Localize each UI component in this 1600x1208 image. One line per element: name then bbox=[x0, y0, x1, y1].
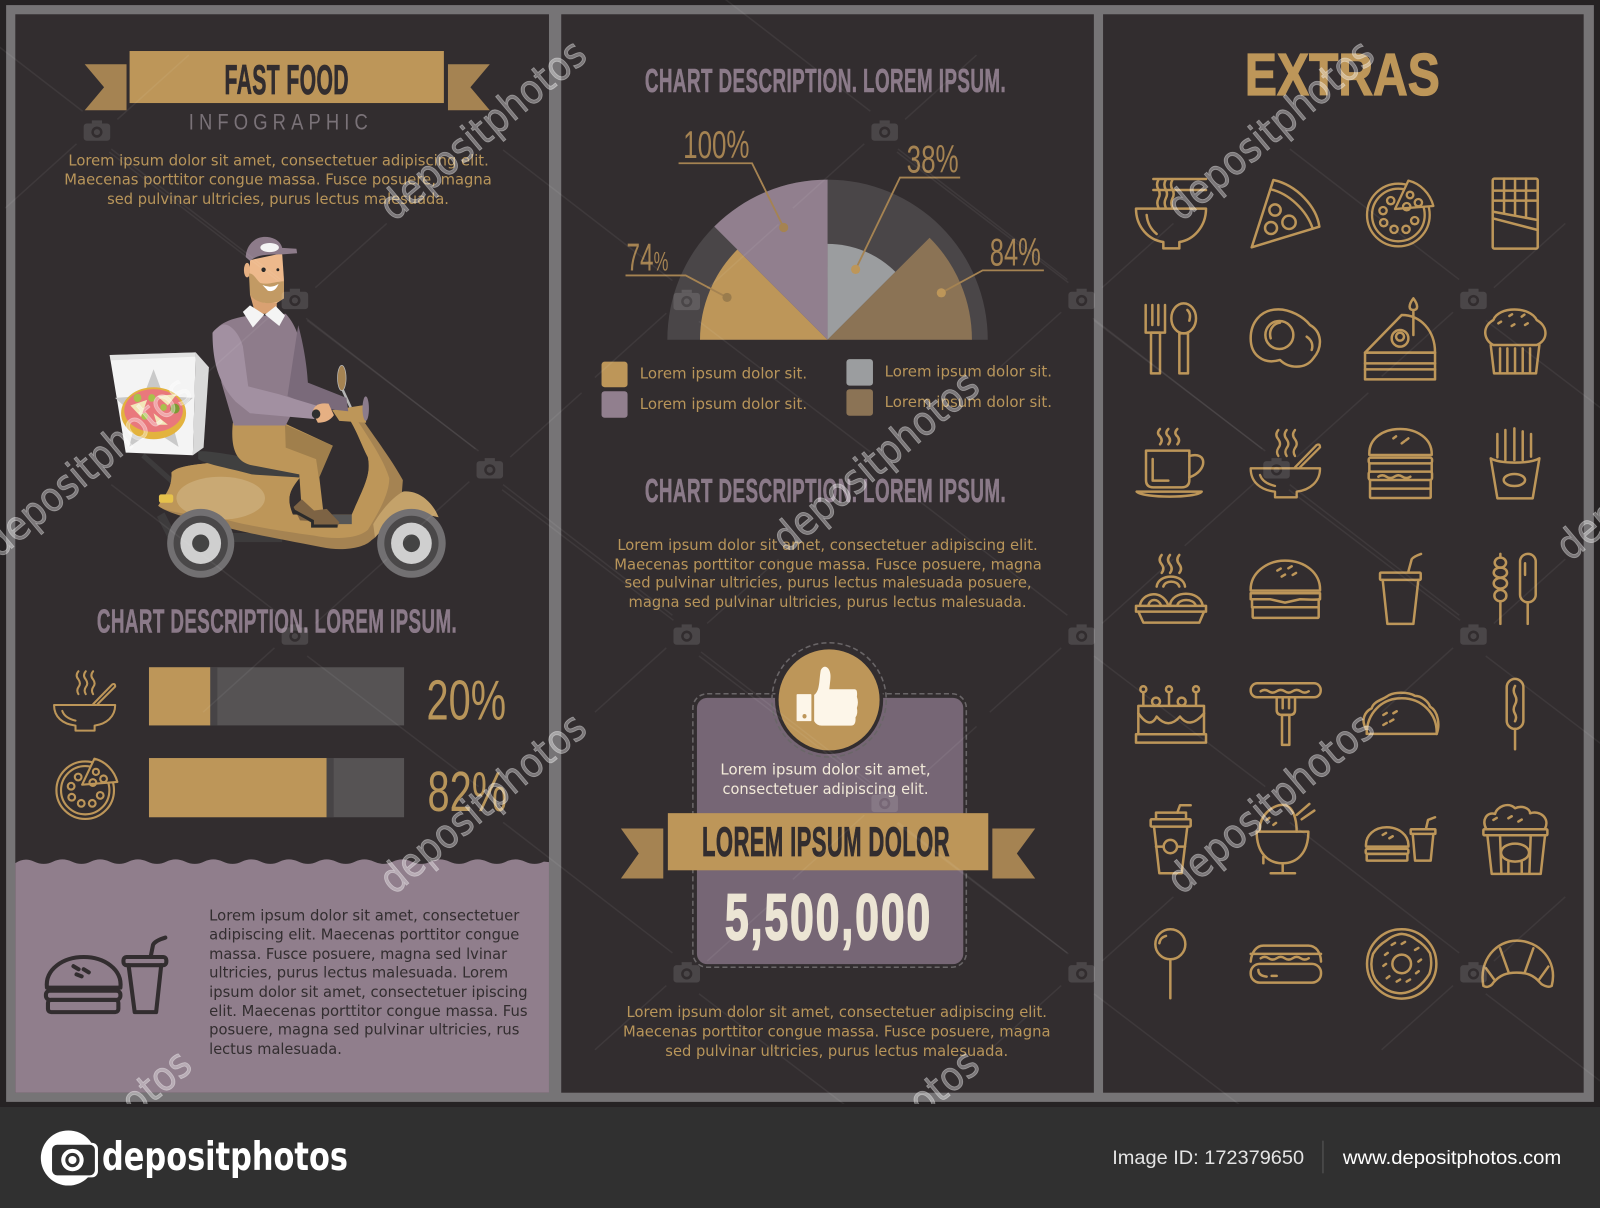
panel: fast food bbox=[15, 51, 549, 1093]
footer divider bbox=[1322, 1141, 1323, 1173]
heading: extras: EXTRAS bbox=[1245, 41, 1440, 108]
mirror and handle bbox=[343, 390, 351, 407]
icon: fried egg bbox=[1251, 309, 1320, 367]
callout: 100%: 100% bbox=[683, 124, 749, 167]
watermarks: depositphotos bbox=[1157, 703, 1383, 903]
watermarks: depositphotos bbox=[369, 703, 596, 903]
icon: noodle bowl bbox=[1136, 179, 1206, 248]
icon: sausage on fork bbox=[1251, 683, 1321, 745]
head bbox=[244, 263, 250, 277]
subtitle: INFOGRAPHIC bbox=[189, 110, 368, 135]
bar chart: 20%: 20% bbox=[427, 668, 506, 731]
icon: stacked burger bbox=[1369, 429, 1432, 498]
intro text: Lorem ipsum dolor sit amet, consectetuer adipiscing elit. bbox=[68, 151, 489, 169]
bar chart: 82%: 82% bbox=[428, 760, 507, 823]
icon: birthday cake bbox=[1136, 686, 1206, 743]
description text: sed pulvinar ultricies, purus lectus malesuada posuere, bbox=[624, 574, 1032, 592]
icon: pizza bbox=[56, 759, 117, 819]
pants bbox=[232, 423, 333, 511]
legend bbox=[602, 359, 1052, 418]
footer text bbox=[623, 1003, 1051, 1060]
lavender panel text: elit. Maecenas porttitor congue massa. Fus bbox=[209, 1002, 528, 1020]
lavender panel text: ipsum dolor sit amet, consectetuer ipiscing bbox=[209, 983, 528, 1001]
icon: burger bbox=[1251, 561, 1320, 618]
footer image id: Image ID: 172379650 bbox=[1112, 1147, 1304, 1169]
collar bbox=[243, 305, 264, 328]
icon: noodle plate bbox=[1136, 555, 1206, 623]
icon grid rows 4-7 bbox=[1136, 554, 1553, 999]
wheels bbox=[167, 509, 234, 578]
stat card: consectetuer adipiscing elit. bbox=[722, 780, 929, 798]
description text: Lorem ipsum dolor sit amet, consectetuer adipiscing elit. bbox=[617, 536, 1038, 554]
torso bbox=[214, 314, 307, 425]
icon: coffee cup bbox=[1137, 429, 1203, 497]
panel: fast food background bbox=[15, 14, 549, 1093]
icon: coffee to go bbox=[1151, 805, 1191, 873]
icon: taco bbox=[1364, 693, 1438, 734]
lavender panel text: massa. Fusce posuere, magna sed lvinar bbox=[209, 945, 508, 963]
callout: 74%: 74% bbox=[627, 236, 668, 279]
card text: Lorem ipsum dolor sit amet, bbox=[720, 760, 931, 778]
big number: 5,500,000 bbox=[725, 881, 932, 954]
footer text: sed pulvinar ultricies, purus lectus malesuada. bbox=[665, 1042, 1008, 1060]
lavender panel text: posuere, magna sed pulvinar ultricies, rus bbox=[209, 1021, 519, 1039]
icon: donut bbox=[1367, 929, 1436, 999]
seat bbox=[198, 451, 300, 477]
icon: cup with straw bbox=[1380, 554, 1421, 624]
watermarks: depositphotos bbox=[1157, 29, 1383, 230]
lavender panel text: adipiscing elit. Maecenas porttitor congue bbox=[209, 926, 519, 944]
icon: thumbs up badge bbox=[772, 643, 886, 757]
icon: skewer and corn dog bbox=[1494, 554, 1536, 624]
icon: corn dog bbox=[1507, 679, 1523, 749]
icon: burger and drink bbox=[46, 938, 166, 1012]
watermarks: depositphotos bbox=[369, 29, 596, 230]
legend: Lorem ipsum dolor sit. bbox=[885, 362, 1052, 380]
scooter body bbox=[158, 411, 439, 549]
stat card bbox=[621, 643, 1035, 967]
cap bbox=[246, 237, 297, 261]
icon: burger and drink bbox=[1366, 817, 1435, 861]
heading: chart 1: CHART DESCRIPTION. LOREM IPSUM. bbox=[645, 63, 1006, 100]
icon: croissant bbox=[1483, 941, 1553, 987]
legend: Lorem ipsum dolor sit. bbox=[640, 365, 807, 383]
description text: magna sed pulvinar ultricies, purus lectus malesuada. bbox=[629, 593, 1027, 611]
footer band bbox=[0, 1107, 1600, 1208]
intro text bbox=[64, 151, 492, 208]
callout: 84% bbox=[937, 231, 1044, 297]
icon: cake slice bbox=[1365, 298, 1435, 379]
panel: charts bbox=[602, 63, 1052, 1060]
icon: ice cream bbox=[1257, 804, 1314, 873]
panel: extras background bbox=[1103, 14, 1584, 1093]
bar chart: 20% bbox=[149, 667, 506, 731]
icon: whole pizza bbox=[1367, 181, 1433, 246]
icon: muffin bbox=[1485, 309, 1545, 373]
footer text: Maecenas porttitor congue massa. Fusce posuere, magna bbox=[623, 1023, 1051, 1041]
shoes bbox=[294, 499, 314, 521]
footer url: www.depositphotos.com bbox=[1342, 1147, 1561, 1169]
description text: Maecenas porttitor congue massa. Fusce posuere, magna bbox=[614, 555, 1042, 573]
description text bbox=[614, 536, 1042, 611]
ribbon: LOREM IPSUM DOLOR bbox=[702, 818, 950, 865]
callout: 100% bbox=[679, 124, 788, 232]
panel: charts background bbox=[561, 14, 1094, 1093]
ribbon title: FAST FOOD bbox=[224, 56, 349, 103]
hand bbox=[313, 403, 334, 423]
panel: extras bbox=[1136, 41, 1553, 999]
icon: soup bowl bbox=[54, 671, 115, 731]
lavender panel text: ultricies, purus lectus malesuada. Lorem bbox=[209, 963, 508, 981]
intro text: Maecenas porttitor congue massa. Fusce posuere, magna bbox=[64, 171, 492, 189]
icon: chocolate bar bbox=[1493, 179, 1538, 249]
illustration: delivery man on scooter bbox=[110, 237, 446, 578]
lavender panel text bbox=[209, 906, 528, 1058]
watermarks: depositphotos bbox=[762, 361, 989, 562]
icon: fries bbox=[1491, 428, 1539, 498]
footer logo bbox=[41, 1130, 348, 1186]
icon grid rows 1-3 bbox=[1136, 179, 1545, 498]
footboard bbox=[296, 515, 352, 524]
callout: 84%: 84% bbox=[990, 231, 1041, 274]
footer logo: depositphotos bbox=[102, 1135, 348, 1180]
callout: 74% bbox=[626, 236, 732, 302]
legend: Lorem ipsum dolor sit. bbox=[640, 395, 807, 413]
footer text: Lorem ipsum dolor sit amet, consectetuer adipiscing elit. bbox=[627, 1003, 1047, 1021]
neck bbox=[250, 295, 277, 314]
semi-circle chart bbox=[667, 180, 988, 340]
heading: chart 2: CHART DESCRIPTION. LOREM IPSUM. bbox=[645, 473, 1006, 510]
icon: hot dog bbox=[1251, 946, 1321, 983]
icon: popcorn bbox=[1483, 805, 1547, 874]
ribbon bbox=[621, 813, 1035, 878]
intro text: sed pulvinar ultricies, purus lectus malesuada. bbox=[107, 190, 449, 208]
lavender panel text: lectus malesuada. bbox=[209, 1040, 342, 1058]
callout: 38%: 38% bbox=[907, 138, 959, 181]
lavender panel bbox=[15, 859, 549, 1093]
legend: Lorem ipsum dolor sit. bbox=[885, 393, 1052, 411]
rack bbox=[143, 455, 175, 484]
delivery box bbox=[110, 352, 209, 455]
heading: chart description: CHART DESCRIPTION. LOREM IPSUM. bbox=[97, 604, 457, 641]
lavender panel text: Lorem ipsum dolor sit amet, consectetuer bbox=[209, 906, 520, 924]
callout: 38% bbox=[851, 138, 960, 274]
icon: lollipop bbox=[1155, 929, 1185, 998]
icon: pizza slice bbox=[1252, 180, 1319, 247]
ribbon title bbox=[85, 51, 490, 110]
icon: fork and spoon bbox=[1146, 303, 1196, 373]
icon: soup bowl bbox=[1251, 430, 1320, 497]
bar chart: 82% bbox=[149, 758, 507, 823]
